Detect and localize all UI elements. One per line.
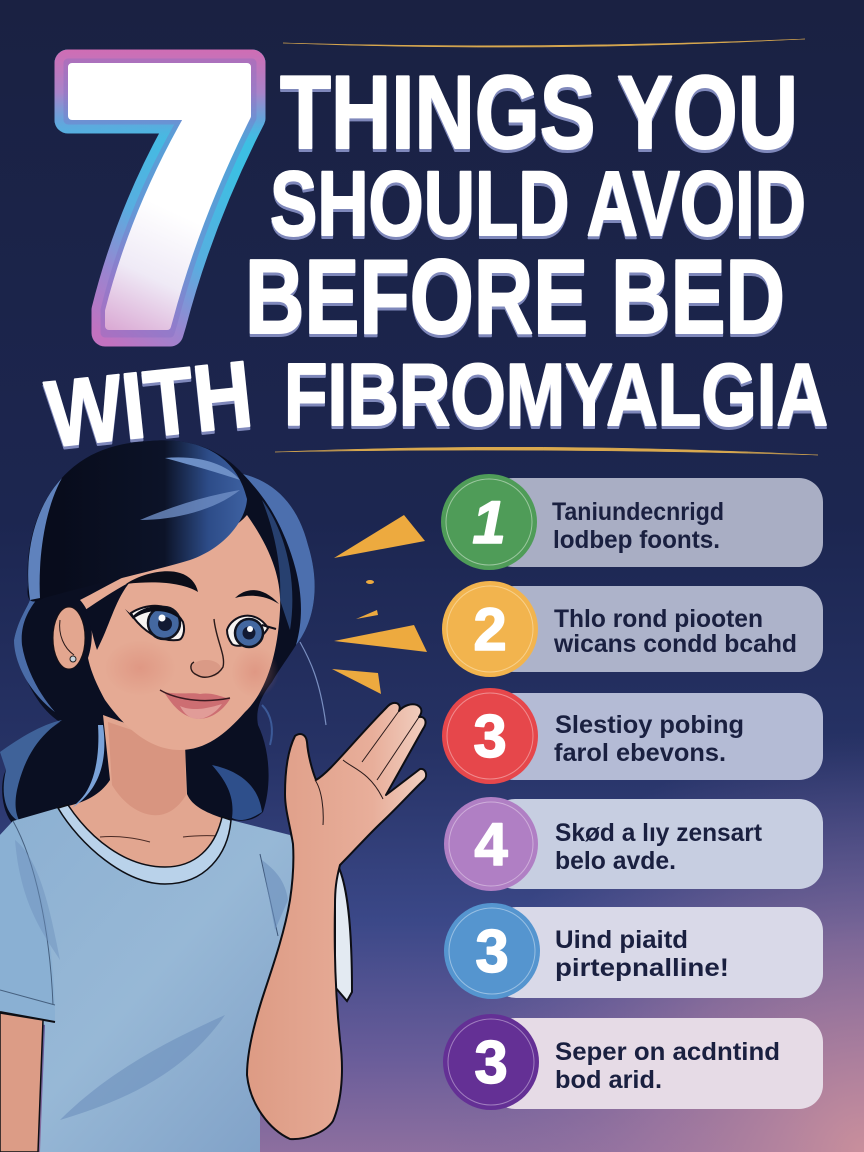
list item 2: 2: [473, 596, 507, 663]
icon: burst triangle 4: [332, 669, 381, 694]
list item 2: [442, 581, 823, 677]
list item 5: pirtepnalline!: [555, 954, 729, 982]
mouth: [160, 690, 230, 719]
list item 2: wicans condd bcahd: [553, 630, 797, 658]
collar: [58, 805, 231, 884]
list item 2: Thlo rond pioоten: [554, 605, 763, 633]
list item 3: 3: [473, 703, 507, 770]
list item 1: Taniundecnrigd: [552, 498, 724, 526]
list item 4: [444, 797, 823, 891]
nose: [191, 619, 224, 678]
list item 3: Slestioy pobing: [555, 711, 744, 739]
icon: large number 7: [68, 63, 252, 333]
eyebrows: [126, 571, 198, 592]
hair top: [28, 440, 247, 602]
icon: burst triangle 1: [334, 515, 425, 558]
neck: [68, 715, 222, 867]
list item 4: Skød a lıy zensart: [555, 819, 763, 847]
illustration: woman waving: [0, 440, 426, 1152]
list item 1: lodbep foonts.: [553, 526, 720, 554]
list item 3: [442, 688, 823, 784]
decorative line: top: [283, 39, 805, 47]
ear: [53, 607, 85, 669]
list item 6: [443, 1014, 823, 1110]
blush: [104, 640, 176, 696]
list item 6: 3: [474, 1029, 508, 1096]
left arm: [0, 1013, 43, 1152]
raised arm and hand: [247, 703, 426, 1139]
title: WITH: [41, 341, 257, 467]
list item 4: 4: [474, 811, 508, 878]
list item 6: Seper on acdntind: [555, 1038, 780, 1066]
icon: burst speck: [366, 580, 374, 584]
list item 1: [441, 474, 823, 570]
left eye: [125, 606, 184, 640]
right eye: [227, 616, 276, 647]
list item 6: bod arid.: [555, 1066, 662, 1094]
title: [41, 55, 828, 467]
decorative line: bottom: [275, 447, 818, 455]
list item 1: 1: [472, 489, 506, 556]
list item 3: farol ebevons.: [554, 739, 726, 767]
icon: burst triangle 3: [334, 625, 427, 652]
face: [80, 515, 280, 750]
icon: burst triangle 2: [356, 610, 378, 619]
list item 5: Uind piaitd: [555, 926, 688, 954]
list item 4: belo avde.: [555, 847, 676, 875]
list item 5: 3: [475, 918, 509, 985]
t-shirt: [0, 808, 352, 1152]
hair back: [2, 440, 315, 824]
hair highlights: [243, 474, 315, 645]
earring: [70, 656, 76, 662]
list item 5: [444, 903, 823, 999]
